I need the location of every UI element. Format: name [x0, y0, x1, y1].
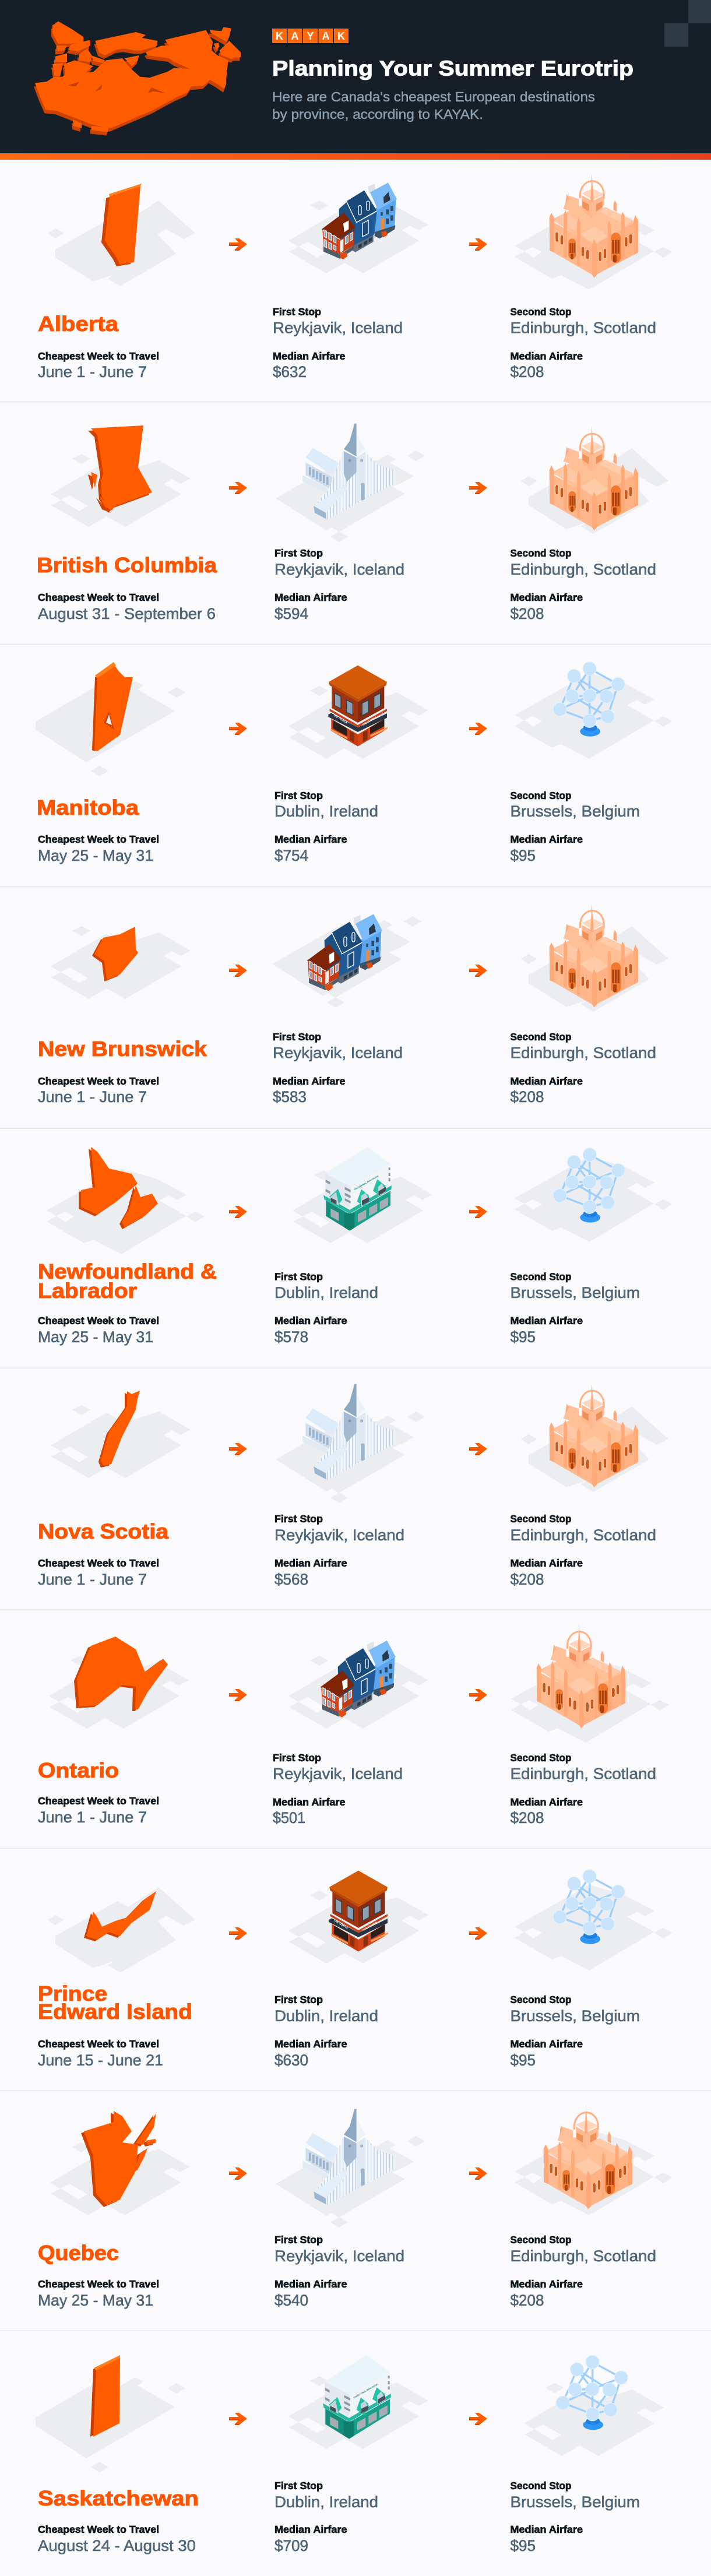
second stop illustration: Edinburgh cathedral [521, 427, 668, 534]
cheapest week: August 31 - September 6 [38, 605, 216, 622]
KAYAK logo: A [291, 30, 298, 42]
cheapest week: June 15 - June 21 [38, 2051, 163, 2069]
arrow [229, 2413, 247, 2425]
cheapest week: Cheapest Week to Travel [38, 2038, 159, 2050]
first stop text [274, 1271, 378, 1346]
panel: New Brunswick [0, 887, 711, 1128]
cheapest week: June 1 - June 7 [38, 363, 147, 381]
panel: Nova Scotia [0, 1368, 711, 1610]
first stop text: Reykjavik, Iceland [274, 2247, 404, 2265]
arrow [469, 1689, 487, 1701]
map of Canada [34, 22, 241, 136]
province name: Ontario [38, 1758, 119, 1782]
second stop text: Brussels, Belgium [511, 803, 640, 820]
second stop text: Second Stop [511, 1752, 571, 1764]
second stop illustration: Edinburgh cathedral [521, 1384, 668, 1492]
arrow [469, 238, 487, 251]
province map: Quebec [50, 2111, 190, 2215]
cheapest week [38, 1315, 159, 1346]
first stop text: $578 [274, 1328, 308, 1346]
panel: Newfoundland & Labrador [0, 1129, 711, 1368]
first stop text: First Stop [274, 1994, 323, 2005]
second stop text: $208 [511, 2292, 544, 2309]
province name: Newfoundland & [38, 1259, 217, 1283]
second stop text: $208 [511, 605, 544, 622]
first stop illustration: Reykjavik houses [288, 182, 428, 273]
cheapest week [38, 2524, 196, 2554]
arrow [469, 1206, 487, 1218]
cheapest week: May 25 - May 31 [38, 1328, 153, 1346]
province name [38, 1259, 217, 1303]
second stop text: Edinburgh, Scotland [511, 1526, 656, 1544]
first stop text: $754 [274, 847, 308, 864]
panel: British Columbia [0, 402, 711, 644]
second stop text: Median Airfare [511, 1557, 583, 1569]
second stop text [511, 1994, 640, 2069]
first stop text: $540 [274, 2292, 308, 2309]
arrow [229, 238, 247, 251]
arrow [229, 1443, 247, 1455]
cheapest week: May 25 - May 31 [38, 2292, 153, 2309]
first stop text: Reykjavik, Iceland [274, 1526, 404, 1544]
arrow [229, 965, 247, 977]
second stop text: $208 [511, 1088, 544, 1106]
first stop text: First Stop [274, 2480, 323, 2491]
cheapest week: Cheapest Week to Travel [38, 833, 159, 845]
second stop text: $95 [511, 2051, 536, 2069]
first stop illustration: Reykjavik church [276, 1384, 425, 1503]
first stop text [274, 790, 378, 864]
arrow [469, 2167, 487, 2180]
second stop illustration: Edinburgh cathedral [515, 174, 673, 290]
second stop text: Median Airfare [511, 1796, 583, 1808]
cheapest week: Cheapest Week to Travel [38, 1315, 159, 1326]
first stop illustration: Reykjavik houses [272, 914, 421, 1008]
cheapest week: Cheapest Week to Travel [38, 592, 159, 603]
second stop text: Brussels, Belgium [511, 2493, 640, 2511]
first stop illustration: Dublin pub [293, 1147, 432, 1243]
second stop illustration: Edinburgh cathedral [515, 2105, 673, 2215]
cheapest week [38, 1075, 159, 1106]
first stop text: Median Airfare [273, 350, 346, 362]
first stop text [274, 2234, 404, 2309]
province map: New Brunswick [51, 926, 191, 999]
cheapest week: Cheapest Week to Travel [38, 2524, 159, 2535]
first stop text [273, 1031, 403, 1106]
second stop text [511, 1031, 656, 1106]
first stop text: $630 [274, 2051, 308, 2069]
arrow [229, 1206, 247, 1218]
second stop illustration: Brussels Atomium [524, 2355, 664, 2456]
first stop text [274, 1513, 404, 1588]
second stop text: Median Airfare [511, 833, 583, 845]
first stop text: Median Airfare [274, 592, 347, 603]
province name: Labrador [38, 1279, 137, 1303]
first stop text: Median Airfare [274, 833, 347, 845]
second stop text: Median Airfare [511, 592, 583, 603]
first stop text [274, 2480, 378, 2554]
province name: Quebec [38, 2241, 119, 2265]
KAYAK logo: K [337, 30, 345, 42]
province name: British Columbia [37, 553, 217, 577]
province map: Ontario [49, 1637, 189, 1729]
second stop illustration: Brussels Atomium [515, 1870, 673, 1970]
second stop text [511, 2234, 656, 2309]
second stop text: Median Airfare [511, 2524, 583, 2535]
first stop text: First Stop [273, 1031, 321, 1043]
cheapest week [38, 350, 159, 381]
second stop text [511, 1271, 640, 1346]
cheapest week [38, 1795, 159, 1826]
province name: Manitoba [37, 796, 139, 819]
cheapest week: June 1 - June 7 [38, 1808, 147, 1826]
second stop text: Edinburgh, Scotland [511, 319, 656, 337]
second stop text: Brussels, Belgium [511, 1284, 640, 1301]
province name: Prince [38, 1982, 107, 2005]
first stop text: First Stop [273, 306, 321, 318]
province name: New Brunswick [38, 1037, 207, 1061]
cheapest week: August 24 - August 30 [38, 2537, 196, 2554]
cheapest week: Cheapest Week to Travel [38, 1075, 159, 1087]
panel: Saskatchewan [0, 2331, 711, 2576]
province map: Newfoundland and Labrador [47, 1147, 205, 1254]
KAYAK logo [272, 29, 349, 43]
province name: Alberta [38, 312, 119, 336]
second stop illustration: Brussels Atomium [515, 662, 673, 759]
title: Planning Your Summer Eurotrip [272, 56, 633, 80]
first stop illustration: Dublin temple bar [288, 666, 428, 759]
panel: Quebec [0, 2091, 711, 2331]
first stop text: $709 [274, 2537, 308, 2554]
province map: Alberta [48, 184, 195, 286]
first stop text: Reykjavik, Iceland [273, 1765, 403, 1782]
first stop text [273, 306, 403, 381]
province map: Manitoba [36, 662, 185, 776]
second stop text: Second Stop [511, 1271, 571, 1283]
cheapest week [38, 592, 216, 622]
second stop text: Second Stop [511, 2480, 571, 2491]
first stop text: $632 [273, 363, 307, 381]
second stop text: Edinburgh, Scotland [511, 1765, 656, 1782]
panel: Manitoba [0, 645, 711, 886]
second stop text [511, 306, 656, 381]
first stop text: $583 [273, 1088, 307, 1106]
second stop text: Second Stop [511, 306, 571, 318]
first stop text: Dublin, Ireland [274, 2007, 378, 2025]
first stop text: Dublin, Ireland [274, 1284, 378, 1301]
second stop text: Second Stop [511, 2234, 571, 2246]
first stop text [274, 1994, 378, 2069]
cheapest week: Cheapest Week to Travel [38, 350, 159, 362]
header panel [0, 0, 711, 153]
first stop text: Dublin, Ireland [274, 803, 378, 820]
arrow [229, 1927, 247, 1940]
second stop text: Median Airfare [511, 1315, 583, 1326]
arrow [469, 1927, 487, 1940]
KAYAK logo: Y [307, 30, 314, 42]
first stop text: Median Airfare [273, 1796, 346, 1808]
second stop text [511, 1513, 656, 1588]
second stop text: Median Airfare [511, 350, 583, 362]
first stop text: Median Airfare [274, 1315, 347, 1326]
first stop text: $501 [273, 1809, 305, 1827]
first stop text: First Stop [274, 547, 323, 559]
KAYAK logo: A [322, 30, 330, 42]
second stop text: $95 [511, 847, 536, 864]
first stop text: First Stop [274, 790, 323, 801]
cheapest week: Cheapest Week to Travel [38, 1795, 159, 1807]
second stop text: Median Airfare [511, 2278, 583, 2290]
second stop illustration: Edinburgh cathedral [521, 903, 668, 1012]
second stop text: Second Stop [511, 1513, 571, 1525]
panel: Ontario [0, 1610, 711, 1848]
first stop text: First Stop [274, 1271, 323, 1283]
first stop text: $594 [274, 605, 308, 622]
second stop text: $95 [511, 1328, 536, 1346]
second stop text: Second Stop [511, 547, 571, 559]
second stop text [511, 547, 656, 622]
first stop text: Median Airfare [274, 2524, 347, 2535]
province map: Saskatchewan [36, 2355, 185, 2472]
second stop text [511, 790, 640, 864]
second stop text: $95 [511, 2537, 536, 2554]
first stop text: First Stop [274, 2234, 323, 2246]
first stop text: First Stop [274, 1513, 323, 1525]
arrow [469, 482, 487, 494]
first stop text [274, 547, 404, 622]
second stop text: $208 [511, 1571, 544, 1588]
arrow [229, 482, 247, 494]
panel: Prince Edward Island [0, 1849, 711, 2091]
panel: Alberta [0, 160, 711, 402]
first stop text: Reykjavik, Iceland [273, 319, 403, 337]
first stop text: Median Airfare [274, 2038, 347, 2050]
province name: Saskatchewan [38, 2486, 199, 2510]
province name: Nova Scotia [38, 1519, 169, 1543]
first stop text: Reykjavik, Iceland [274, 561, 404, 578]
subtitle: Here are Canada's cheapest European destinations [272, 89, 595, 104]
first stop illustration: Dublin temple bar [288, 1871, 428, 1963]
first stop text: Median Airfare [274, 2278, 347, 2290]
cheapest week [38, 833, 159, 864]
cheapest week [38, 2278, 159, 2309]
second stop text: Median Airfare [511, 1075, 583, 1087]
KAYAK logo: K [276, 30, 283, 42]
first stop illustration: Reykjavik church [276, 2109, 425, 2227]
first stop text: Dublin, Ireland [274, 2493, 378, 2511]
second stop text: Second Stop [511, 1994, 571, 2005]
cheapest week [38, 1557, 159, 1588]
province name: Edward Island [38, 2000, 192, 2024]
cheapest week: Cheapest Week to Travel [38, 1557, 159, 1569]
second stop text: Second Stop [511, 790, 571, 801]
first stop text: First Stop [273, 1752, 321, 1764]
second stop text: Second Stop [511, 1031, 571, 1043]
first stop text: $568 [274, 1571, 308, 1588]
first stop text: Reykjavik, Iceland [273, 1044, 403, 1062]
subtitle: by province, according to KAYAK. [272, 107, 483, 122]
second stop text [511, 2480, 640, 2554]
second stop text: Median Airfare [511, 2038, 583, 2050]
arrow [469, 723, 487, 735]
cheapest week [38, 2038, 163, 2069]
second stop text: Edinburgh, Scotland [511, 561, 656, 578]
cheapest week: June 1 - June 7 [38, 1571, 147, 1588]
first stop text: Median Airfare [274, 1557, 347, 1569]
first stop illustration: Reykjavik church [276, 424, 425, 542]
decorative corner squares [664, 0, 711, 47]
second stop text: Edinburgh, Scotland [511, 2247, 656, 2265]
first stop text: Median Airfare [273, 1075, 346, 1087]
second stop text: Brussels, Belgium [511, 2007, 640, 2025]
first stop text [273, 1752, 403, 1827]
first stop illustration: Dublin pub [288, 2355, 428, 2449]
second stop illustration: Edinburgh cathedral [511, 1624, 669, 1743]
cheapest week: June 1 - June 7 [38, 1088, 147, 1106]
second stop text: $208 [511, 363, 544, 381]
province map: British Columbia [51, 425, 191, 527]
arrow [229, 1689, 247, 1701]
arrow [469, 1443, 487, 1455]
second stop illustration: Brussels Atomium [515, 1148, 673, 1242]
second stop text: $208 [511, 1809, 544, 1827]
cheapest week: May 25 - May 31 [38, 847, 153, 864]
arrow [469, 965, 487, 977]
cheapest week: Cheapest Week to Travel [38, 2278, 159, 2290]
second stop text: Edinburgh, Scotland [511, 1044, 656, 1062]
province name [38, 1982, 192, 2024]
arrow [469, 2413, 487, 2425]
second stop text [511, 1752, 656, 1827]
province map: Nova Scotia [51, 1391, 191, 1478]
subtitle [272, 89, 595, 122]
first stop illustration: Reykjavik houses [288, 1641, 428, 1729]
province map: Prince Edward Island [48, 1887, 195, 1973]
header accent bar [0, 153, 711, 160]
arrow [229, 2167, 247, 2180]
arrow [229, 723, 247, 735]
